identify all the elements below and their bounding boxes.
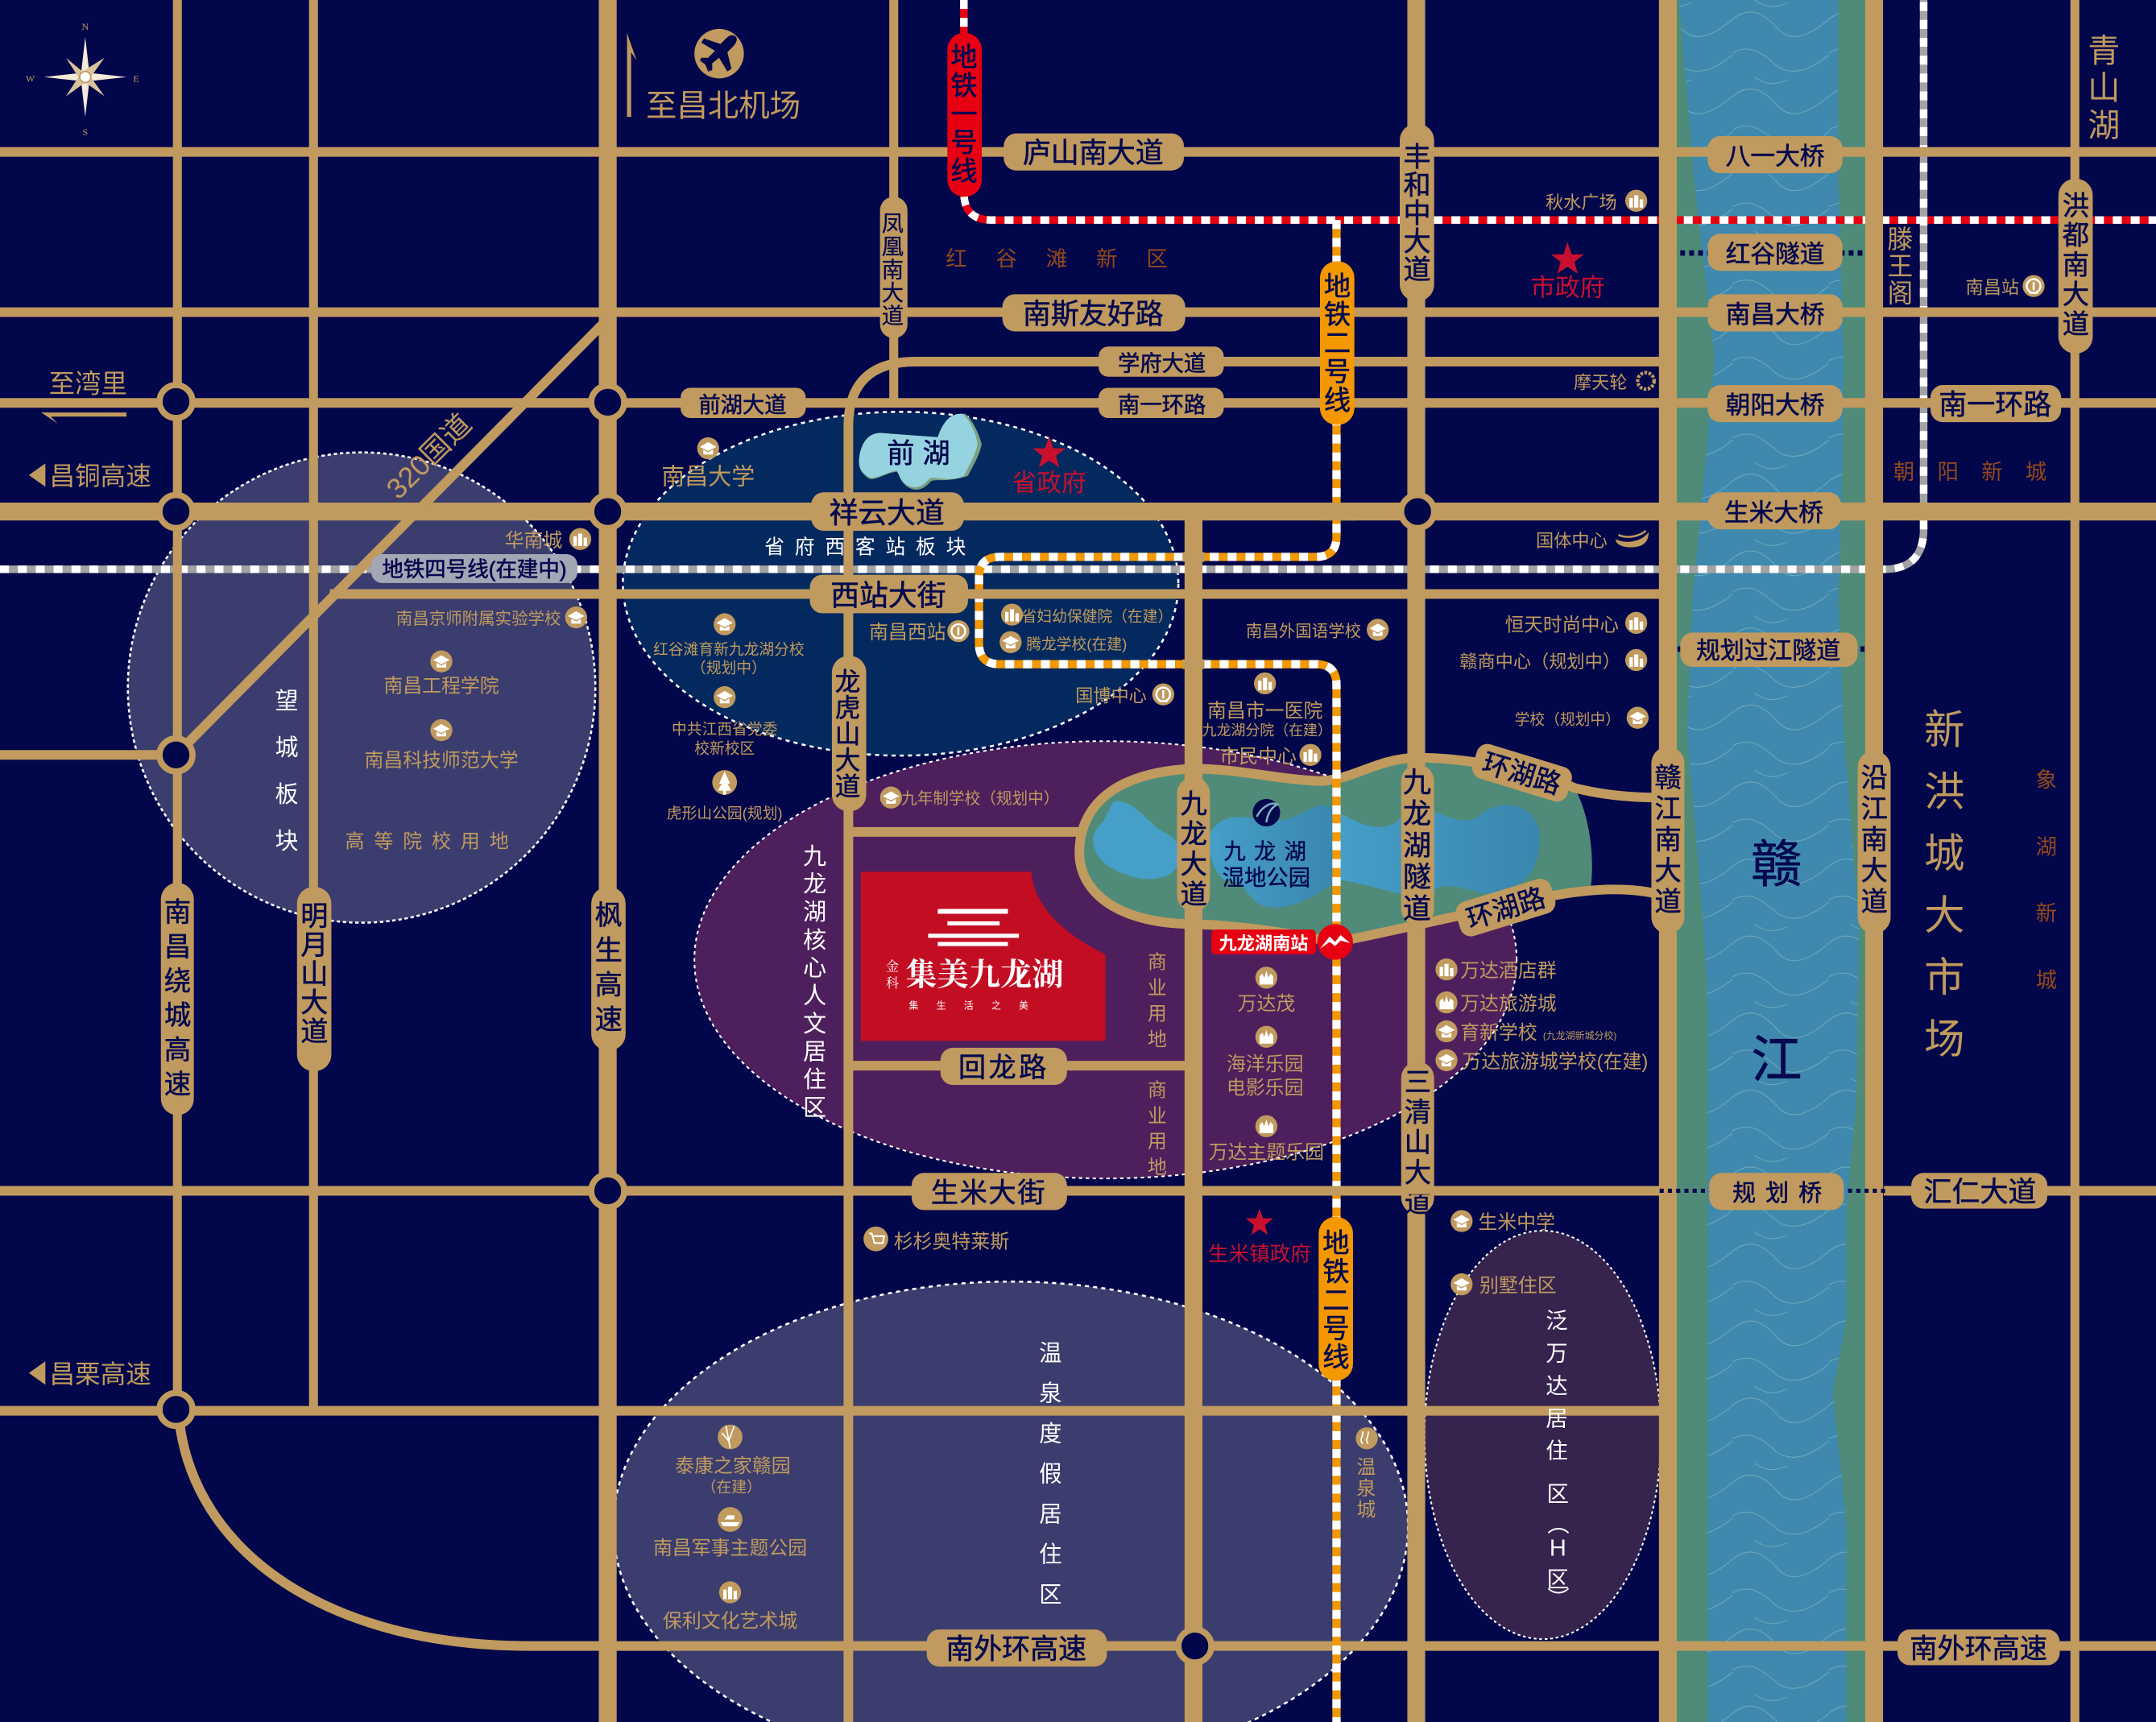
poi: 南昌工程学院 xyxy=(383,651,499,697)
poi: 南昌外国语学校: 南昌外国语学校 xyxy=(1246,622,1361,640)
poi: 育新学校: (九龙湖新城分校) xyxy=(1543,1029,1616,1041)
poi: 南昌科技师范大学 xyxy=(364,719,519,772)
poi: 南昌市一医院: 九龙湖分院（在建） xyxy=(1202,722,1332,739)
poi: 南昌军事主题公园: 南昌军事主题公园 xyxy=(653,1538,807,1559)
zone: 温泉度假居住区 xyxy=(613,1281,1408,1722)
pill: 南一环路 east: 南一环路 xyxy=(1939,390,2051,421)
poi: 省政府: 省政府 xyxy=(1012,469,1086,497)
pill: 前湖大道 xyxy=(681,387,805,418)
pill: 回龙路 xyxy=(941,1048,1067,1085)
pill: 生米大街: 生米大街 xyxy=(931,1178,1046,1208)
road overlay: 祥云大道 over metro 2 xyxy=(1320,507,1355,517)
label: 商业用地 north: 商业用地 xyxy=(1144,952,1166,1054)
label: 红谷滩新区: 红谷滩新区 xyxy=(946,246,1197,271)
pill: 环湖路 upper xyxy=(1470,741,1575,805)
label: 泛万达居住区（H区）: 泛万达居住 xyxy=(1542,1309,1568,1472)
pill: 八一大桥: 八一大桥 xyxy=(1726,143,1825,171)
poi: 海洋乐园电影乐园: 海洋乐园 xyxy=(1227,1053,1303,1075)
pill: 枫生高速: 枫生高速 xyxy=(590,900,622,1040)
poi: 市民中心 xyxy=(1219,744,1322,768)
label: 泛万达居住区（H区） xyxy=(1542,1309,1570,1608)
poi: 万达主题乐园: 万达主题乐园 xyxy=(1209,1142,1324,1164)
poi: 南昌站 xyxy=(1966,275,2045,298)
pill: 庐山南大道 xyxy=(1004,134,1184,171)
pill: 明月山大道: 明月山大道 xyxy=(296,901,328,1045)
pill: 地铁二号线 north: 地铁二号线 xyxy=(1319,272,1350,414)
poi: 九龙湖湿地公园: 湿地公园 xyxy=(1223,865,1310,890)
lake: 前湖: 前湖 xyxy=(887,439,958,470)
label: 省府西客站板块: 省府西客站板块 xyxy=(764,536,976,558)
poi: 南昌军事主题公园 xyxy=(653,1507,807,1559)
poi: 虎形山公园 xyxy=(667,770,783,822)
pill: 西站大街: 西站大街 xyxy=(830,580,946,612)
pill: 三清山大道: 三清山大道 xyxy=(1400,1068,1430,1219)
bridge dots: 规划桥 xyxy=(1660,1190,1886,1192)
label: 高等院校用地: 高等院校用地 xyxy=(346,831,519,853)
poi: 南昌科技师范大学: 南昌科技师范大学 xyxy=(364,750,519,772)
tunnel dots: 规划过江隧道 xyxy=(1678,648,1864,651)
pill: 祥云大道: 祥云大道 xyxy=(829,497,945,529)
poi: 红谷滩育新九龙湖分校: （规划中） xyxy=(691,660,767,677)
lake: 九龙湖湿地公园 xyxy=(1079,758,1592,942)
poi: 温泉城: 温泉城 xyxy=(1353,1456,1376,1521)
label: 九龙湖核心人文居住区: 九龙湖核心人文居住区 xyxy=(800,843,826,1123)
label: 温泉度假居住区: 温泉度假居住区 xyxy=(1037,1341,1061,1623)
zone: 泛万达居住区 xyxy=(1425,1231,1661,1639)
pill: 生米大桥: 生米大桥 xyxy=(1724,499,1823,527)
zone: 省府西客站板块 xyxy=(623,412,1178,755)
poi: 红谷滩育新九龙湖分校: 红谷滩育新九龙湖分校 xyxy=(653,641,805,658)
pill: 南一环路: 南一环路 xyxy=(1118,392,1206,417)
label: 泛万达居住区（H区）: H xyxy=(1550,1536,1566,1562)
pill: 南昌大桥 xyxy=(1707,294,1843,331)
label: 泛万达居住区（H区）: 区 xyxy=(1547,1481,1569,1506)
pill: 南一环路 xyxy=(1099,387,1223,418)
logo: 金科集美九龙湖: 金 xyxy=(886,960,899,975)
pill: 回龙路: 回龙路 xyxy=(958,1053,1049,1083)
pill: 环湖路 lower: 环湖路 xyxy=(1463,883,1549,935)
pill: 南外环高速 xyxy=(927,1629,1107,1666)
pill: 地铁四号线: 地铁四号线(在建中) xyxy=(382,557,567,582)
poi: 保利文化艺术城 xyxy=(663,1581,797,1633)
poi: 温泉城 xyxy=(1353,1427,1378,1521)
junctions xyxy=(159,385,1434,1662)
pill: 地铁二号线 south: 地铁二号线 xyxy=(1318,1229,1348,1372)
poi: 华南城 xyxy=(505,528,591,552)
poi: 市政府: 市政府 xyxy=(1530,274,1604,302)
poi: 九龙湖湿地公园: 九龙湖 xyxy=(1223,839,1314,864)
zone: 望城板块 xyxy=(128,453,595,923)
pill: 规划桥: 规划桥 xyxy=(1732,1180,1831,1207)
pill: 丰和中大道: 丰和中大道 xyxy=(1399,142,1431,283)
poi: 泰康之家赣园 xyxy=(675,1425,791,1495)
pill: 地铁一号线: 地铁一号线 xyxy=(946,43,976,185)
poi: 腾龙学校: 腾龙学校(在建) xyxy=(1026,635,1127,652)
poi: 南昌西站: 南昌西站 xyxy=(869,622,946,644)
poi: 万达旅游城: 万达旅游城 xyxy=(1460,993,1557,1015)
pill: 西站大街 xyxy=(810,575,968,613)
poi: 万达主题乐园 xyxy=(1209,1116,1324,1164)
poi: 九龙湖湿地公园 xyxy=(1223,799,1314,890)
poi: 国体中心 xyxy=(1536,531,1649,551)
poi: 省妇幼保健院 xyxy=(1001,603,1173,626)
pill: 庐山南大道: 庐山南大道 xyxy=(1023,138,1164,169)
poi: 泰康之家赣园: 泰康之家赣园 xyxy=(675,1455,791,1477)
pill: 学府大道 xyxy=(1099,346,1223,377)
label: 泛万达居住区（H区）: ） xyxy=(1546,1587,1570,1608)
pill: 朝阳大桥: 朝阳大桥 xyxy=(1726,391,1825,420)
label: 滕王阁: 滕王阁 xyxy=(1884,226,1913,306)
icon: airplane xyxy=(694,29,744,78)
pill: 丰和中大道 xyxy=(1399,124,1434,301)
pill: 龙虎山大道: 龙虎山大道 xyxy=(831,669,860,799)
label: 昌栗高速: 昌栗高速 xyxy=(49,1360,151,1389)
pill: 环湖路 upper: 环湖路 xyxy=(1479,748,1565,801)
poi: 摩天轮 xyxy=(1574,372,1654,392)
pill: 红谷隧道 xyxy=(1707,234,1843,271)
poi: 育新学校 xyxy=(1435,1020,1616,1044)
poi: 泰康之家赣园: （在建） xyxy=(701,1478,762,1495)
pill: 朝阳大桥 xyxy=(1707,385,1843,422)
poi: 生米中学: 生米中学 xyxy=(1478,1212,1555,1234)
pill: 汇仁大道: 汇仁大道 xyxy=(1924,1177,2036,1208)
poi: 中共江西省党委校新校区 xyxy=(672,686,778,757)
label: 望城板块: 望城板块 xyxy=(271,688,299,875)
pill: 九龙湖隧道: 九龙湖隧道 xyxy=(1399,768,1430,925)
label: 朝阳新城: 朝阳新城 xyxy=(1893,460,2069,484)
poi: 市民中心: 市民中心 xyxy=(1219,746,1297,768)
metro line 2 track xyxy=(979,220,1336,1722)
pill: 九龙大道: 九龙大道 xyxy=(1176,789,1206,910)
poi: 别墅住区 xyxy=(1450,1273,1557,1297)
tunnel dots: 红谷隧道 xyxy=(1680,251,1864,255)
label: 泛万达居住区（H区）: （ xyxy=(1546,1513,1570,1534)
poi: 虎形山公园: 虎形山公园(规划) xyxy=(667,805,783,822)
poi: 南昌站: 南昌站 xyxy=(1966,278,2019,298)
road overlay: crossings over metro 2 xyxy=(970,557,1355,1411)
pill: 红谷隧道: 红谷隧道 xyxy=(1726,240,1825,268)
road overlay: 生米大街 over 三清山大道 xyxy=(1401,1189,1434,1193)
pill: 生米大桥 xyxy=(1707,492,1841,529)
poi: 万达茂 xyxy=(1238,967,1295,1015)
label: 青山湖: 青山湖 xyxy=(2083,34,2119,145)
metro line 4 track xyxy=(0,0,1923,569)
poi: 生米中学 xyxy=(1450,1210,1555,1234)
poi: 秋水广场: 秋水广场 xyxy=(1546,192,1617,213)
metro line 1 track xyxy=(964,0,2156,220)
logo: 金科集美九龙湖: 集生活之美 xyxy=(909,999,1046,1011)
poi: 九年制学校: 九年制学校（规划中） xyxy=(901,790,1059,808)
pill: 环湖路 lower xyxy=(1453,876,1558,939)
label: 象湖新城: 象湖新城 xyxy=(2032,768,2056,1036)
pill: 南昌大桥: 南昌大桥 xyxy=(1726,300,1825,329)
poi: 国博中心: 国博中心 xyxy=(1075,686,1147,706)
logo: 金科集美九龙湖: 科 xyxy=(886,976,899,991)
poi: 中共江西省党委校新校区: 校新校区 xyxy=(694,740,755,757)
poi: 南昌外国语学校 xyxy=(1246,619,1388,641)
poi: 南昌大学: 南昌大学 xyxy=(661,464,755,491)
poi: 保利文化艺术城: 保利文化艺术城 xyxy=(663,1611,797,1633)
pill: 规划过江隧道: 规划过江隧道 xyxy=(1696,638,1840,664)
pill: 前湖大道: 前湖大道 xyxy=(698,392,787,417)
poi: 别墅住区: 别墅住区 xyxy=(1479,1275,1557,1297)
poi: 生米镇政府: 生米镇政府 xyxy=(1208,1242,1311,1265)
poi: 学校（规划中）: 学校（规划中） xyxy=(1515,711,1620,728)
river: 赣江 xyxy=(1672,0,1870,1722)
poi: 国体中心: 国体中心 xyxy=(1536,531,1608,551)
logo: 金科集美九龙湖: 集美九龙湖 xyxy=(905,957,1064,992)
poi: 赣商中心: 赣商中心（规划中） xyxy=(1459,652,1620,672)
poi: 秋水广场 xyxy=(1546,190,1647,213)
poi: 华南城: 华南城 xyxy=(505,530,562,552)
poi: 学校（规划中） xyxy=(1515,707,1649,729)
label: 320国道: 320国道 xyxy=(380,408,478,505)
poi: 生米镇政府 xyxy=(1208,1209,1311,1265)
logo: 金科集美九龙湖 xyxy=(861,871,1106,1041)
lake: 前湖 xyxy=(859,414,982,490)
label: 赣: 赣 xyxy=(1751,837,1802,893)
compass: E xyxy=(133,73,139,85)
pill: 南斯友好路: 南斯友好路 xyxy=(1023,299,1164,330)
poi: 省政府 xyxy=(1012,436,1086,497)
label: 商业用地 south: 商业用地 xyxy=(1144,1079,1166,1182)
poi: 万达酒店群: 万达酒店群 xyxy=(1460,960,1557,982)
compass: N xyxy=(82,21,89,32)
poi: 南昌市一医院 xyxy=(1202,673,1332,739)
arrow: north to airport xyxy=(627,33,636,117)
poi: 中共江西省党委校新校区: 中共江西省党委 xyxy=(672,721,778,738)
pill: 凤凰南大道 xyxy=(878,197,908,338)
poi: 南昌市一医院: 南昌市一医院 xyxy=(1207,700,1322,722)
poi: 恒天时尚中心: 恒天时尚中心 xyxy=(1505,614,1619,635)
poi: 市政府 xyxy=(1530,242,1604,302)
poi: 海洋乐园电影乐园: 电影乐园 xyxy=(1227,1077,1303,1099)
pill: 凤凰南大道: 凤凰南大道 xyxy=(878,212,904,327)
compass: W xyxy=(26,73,35,85)
poi: 南昌工程学院: 南昌工程学院 xyxy=(383,676,499,697)
poi: 南昌大学 xyxy=(661,437,755,491)
poi: 红谷滩育新九龙湖分校 xyxy=(653,613,805,677)
pill: 赣江南大道: 赣江南大道 xyxy=(1650,764,1680,918)
arrow: to 湾里 xyxy=(41,412,126,424)
poi: 南昌京师附属实验学校: 南昌京师附属实验学校 xyxy=(396,610,561,628)
poi: 摩天轮: 摩天轮 xyxy=(1574,372,1628,392)
pill: 明月山大道 xyxy=(296,887,331,1071)
poi: 杉杉奥特莱斯: 杉杉奥特莱斯 xyxy=(894,1231,1009,1252)
label: 新洪城大市场: 新洪城大市场 xyxy=(1918,708,1964,1079)
pill: 祥云大道 xyxy=(811,492,964,531)
poi: 国博中心 xyxy=(1075,684,1174,706)
zone: 九龙湖核心人文居住区 xyxy=(694,741,1517,1178)
label: 昌铜高速: 昌铜高速 xyxy=(49,462,151,491)
poi: 育新学校: 育新学校 xyxy=(1460,1022,1537,1044)
compass: S xyxy=(83,126,88,138)
pill: 南斯友好路 xyxy=(1003,294,1186,331)
label: 泛万达居住区（H区）: 区 xyxy=(1547,1567,1569,1592)
label: 至昌北机场: 至昌北机场 xyxy=(646,89,801,123)
poi: 杉杉奥特莱斯 xyxy=(863,1227,1009,1252)
compass xyxy=(26,21,139,138)
station: 九龙湖南站: 九龙湖南站 xyxy=(1219,933,1308,954)
poi: 万达茂: 万达茂 xyxy=(1238,993,1295,1015)
pill: 规划桥 xyxy=(1709,1173,1844,1210)
label: 江: 江 xyxy=(1751,1033,1802,1089)
poi: 腾龙学校 xyxy=(999,631,1127,653)
pill: 生米大街 xyxy=(912,1173,1067,1210)
station: 九龙湖南站 xyxy=(1211,924,1353,960)
pill: 规划过江隧道 xyxy=(1680,632,1858,667)
pill: 南外环高速: 南外环高速 xyxy=(946,1634,1086,1666)
pill: 南昌绕城高速: 南昌绕城高速 xyxy=(159,898,190,1104)
pill: 南外环高速 east: 南外环高速 xyxy=(1910,1633,2047,1664)
label: 至湾里: 至湾里 xyxy=(49,370,127,399)
poi: 海洋乐园电影乐园 xyxy=(1227,1026,1303,1099)
poi: 省妇幼保健院: 省妇幼保健院（在建） xyxy=(1022,608,1173,625)
pill: 沿江南大道: 沿江南大道 xyxy=(1856,764,1886,918)
pill: 学府大道: 学府大道 xyxy=(1118,351,1206,376)
pill: 洪都南大道: 洪都南大道 xyxy=(2058,192,2089,339)
poi: 万达旅游城学校: 万达旅游城学校(在建) xyxy=(1462,1051,1648,1073)
pill: 八一大桥 xyxy=(1707,136,1843,173)
